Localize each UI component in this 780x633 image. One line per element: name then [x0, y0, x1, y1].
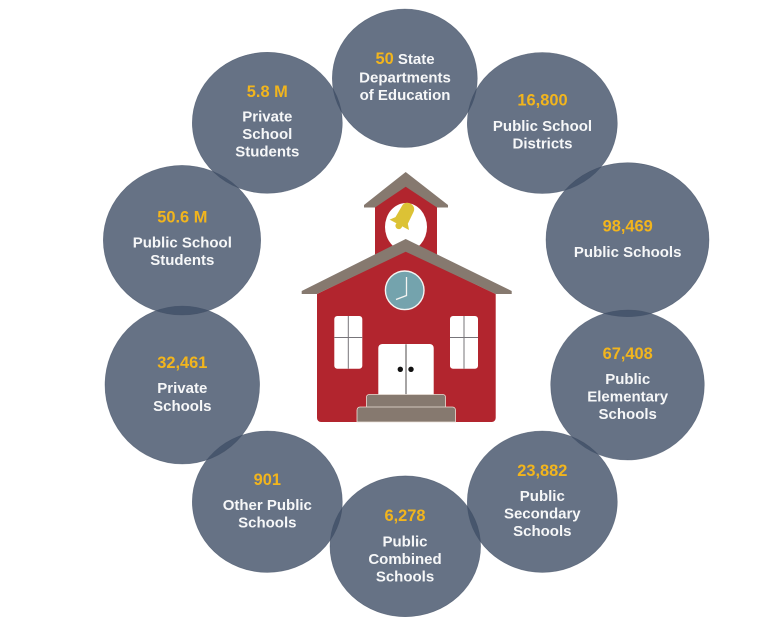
circle: 50.6 M Public School Students: Students	[150, 252, 214, 269]
bell tower	[364, 172, 448, 262]
circle: 901 Other Public Schools: Other Public	[223, 497, 312, 514]
circle: 6,278 Public Combined Schools: 6,278	[384, 507, 426, 525]
circle: 67,408 Public Elementary Schools: Elementary	[587, 389, 669, 406]
circle: 50 State Departments of Education	[332, 9, 477, 147]
circle: 32,461 Private Schools: Schools	[153, 398, 211, 415]
circle: 50 State Departments of Education: Departments	[359, 70, 451, 86]
icon: red schoolhouse	[302, 172, 512, 422]
circle: 50.6 M Public School Students: 50.6 M	[157, 209, 207, 227]
building body	[317, 251, 496, 422]
circle: 32,461 Private Schools: Private	[157, 380, 207, 397]
circle: 16,800 Public School Districts: Districts	[512, 135, 573, 152]
circle: 5.8 M Private School Students	[192, 52, 342, 193]
circle: 67,408 Public Elementary Schools: Public	[605, 371, 650, 388]
icon: bell	[388, 198, 420, 234]
circle: 50.6 M Public School Students: Public School	[133, 235, 232, 252]
circle: 23,882 Public Secondary Schools: Schools	[513, 523, 571, 540]
circle: 50 State Departments of Education: 50 State	[375, 50, 435, 68]
circle: 16,800 Public School Districts: 16,800	[517, 92, 568, 110]
circle: 98,469 Public Schools: Public Schools	[574, 244, 681, 261]
circle: 901 Other Public Schools: 901	[254, 471, 281, 489]
circle: 5.8 M Private School Students: School	[242, 126, 292, 143]
circle: 901 Other Public Schools: Schools	[238, 515, 296, 532]
circle: 23,882 Public Secondary Schools: 23,882	[517, 462, 567, 480]
circle: 23,882 Public Secondary Schools: Secondary	[504, 506, 581, 523]
circle: 6,278 Public Combined Schools: Combined	[368, 551, 442, 568]
circle: 67,408 Public Elementary Schools: 67,408	[603, 345, 653, 363]
circle: 67,408 Public Elementary Schools	[551, 310, 704, 460]
circle: 23,882 Public Secondary Schools	[467, 431, 617, 572]
circle: 50.6 M Public School Students	[103, 165, 261, 315]
circle: 5.8 M Private School Students: Private	[242, 108, 292, 126]
circle: 6,278 Public Combined Schools: Public	[382, 534, 428, 551]
left window	[334, 316, 362, 369]
steps	[357, 394, 456, 422]
circle: 6,278 Public Combined Schools	[330, 476, 481, 617]
clock	[385, 271, 424, 310]
circle: 32,461 Private Schools	[105, 306, 260, 464]
circle: 5.8 M Private School Students: 5.8 M	[247, 83, 288, 101]
circle: 23,882 Public Secondary Schools: Public	[520, 488, 565, 505]
circle: 16,800 Public School Districts	[467, 52, 617, 194]
circle: 5.8 M Private School Students: Students	[235, 144, 299, 161]
circle: 901 Other Public Schools	[192, 431, 342, 572]
circle: 98,469 Public Schools: 98,469	[603, 218, 653, 236]
right window	[450, 316, 478, 369]
circle: 6,278 Public Combined Schools: Schools	[376, 569, 434, 586]
circle: 98,469 Public Schools	[546, 163, 709, 317]
circle: 67,408 Public Elementary Schools: Schools	[599, 406, 657, 423]
main roof	[302, 239, 512, 294]
circle: 16,800 Public School Districts: Public School	[493, 118, 592, 135]
double door	[378, 344, 434, 395]
circle: 50 State Departments of Education: of Education	[360, 87, 450, 104]
circle: 32,461 Private Schools: 32,461	[157, 354, 207, 372]
